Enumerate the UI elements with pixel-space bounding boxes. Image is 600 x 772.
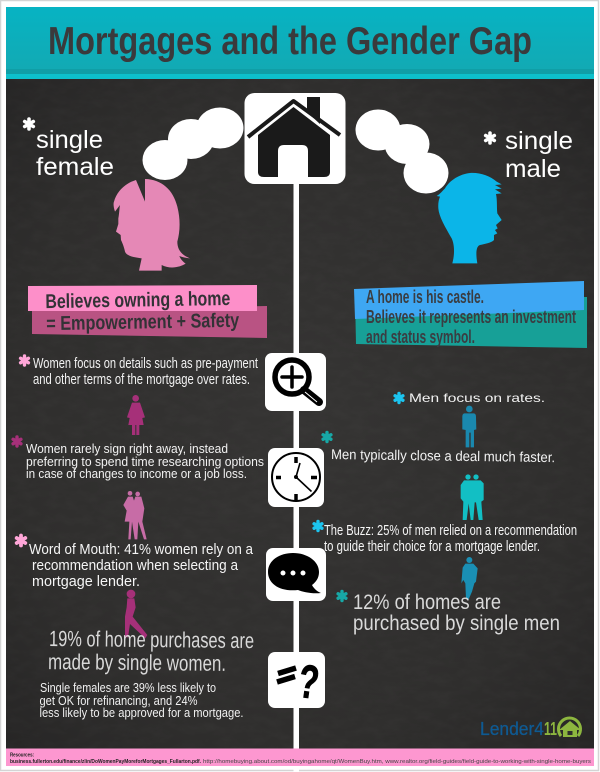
- text: men close faster: Men typically close a deal much faster.: [331, 446, 555, 465]
- icon: walking woman: [125, 590, 147, 638]
- label: single female: single: [36, 126, 103, 154]
- text: women focus on details: and other terms of the mortgage over rates.: [33, 372, 250, 388]
- text: women rarely sign: preferring to spend time researching options: [26, 454, 264, 469]
- text: 19% of home purchases: made by single women.: [48, 649, 226, 676]
- label: single male: male: [505, 155, 561, 183]
- footer: resources: business.fullerton.edu/finance/zlin/DoWomenPayMoreforMortgages_Fullarton.pdf.: [10, 759, 202, 765]
- text: women focus on details: Women focus on details such as pre-payment: [33, 356, 258, 372]
- text: word of mouth: recommendation when selecting a: [32, 557, 239, 574]
- text: single females less likely: [40, 680, 244, 720]
- label: single female: female: [36, 153, 114, 181]
- logo: Lender411: [480, 718, 581, 739]
- text: single females less likely: get OK for refinancing, and 24%: [40, 693, 198, 708]
- callout text: male: A home is his castle.: [366, 287, 484, 307]
- text: women rarely sign: in case of changes to income or a job loss.: [26, 466, 247, 481]
- text: 12% of homes: purchased by single men: [353, 612, 560, 635]
- text: 19% of home purchases: [48, 626, 254, 676]
- callout: female belief: [28, 285, 267, 338]
- footer: resources: http://homebuying.about.com/od/buyingahome/qt/WomenBuy.htm, www.realtor.org/field-guides/field-guide-to-working-with-single-home-buyers: [203, 759, 592, 765]
- icon box: magnifying glass: [265, 353, 326, 411]
- callout text: female: [45, 288, 240, 335]
- footer: resources: [6, 748, 594, 766]
- text: word of mouth: mortgage lender.: [32, 573, 140, 590]
- icon box: speech bubble: [266, 548, 326, 601]
- text: 12% of homes: 12% of homes are: [353, 591, 501, 614]
- text: word of mouth: Word of Mouth: 41% women rely on a: [29, 541, 254, 558]
- icon box: equals question mark: ?: [295, 654, 322, 709]
- icon: two men figures: [461, 474, 484, 520]
- text: women rarely sign: [13, 437, 264, 481]
- label: single male: [486, 127, 573, 183]
- label: single male: single: [505, 127, 573, 155]
- logo: Lender411: Lender4: [480, 719, 544, 739]
- icon: house sign: [244, 93, 346, 184]
- text: the buzz: to guide their choice for a mortgage lender.: [324, 539, 540, 555]
- icon: woman figure: [127, 395, 145, 435]
- icon: walking man: [461, 557, 478, 600]
- icon: two women figures: [123, 491, 147, 539]
- icon: female head silhouette: [114, 179, 190, 271]
- logo: Lender411: 11: [544, 719, 557, 739]
- text: men focus on rates: Men focus on rates.: [409, 391, 545, 405]
- footer: resources: Resources:: [10, 752, 34, 758]
- callout text: female: Believes owning a home: [45, 288, 231, 313]
- text: women focus on details: [21, 356, 258, 388]
- text: single females less likely: Single females are 39% less likely to: [40, 680, 216, 695]
- callout text: female: = Empowerment + Safety: [46, 310, 240, 335]
- text: word of mouth: [17, 536, 254, 590]
- callout text: male: [366, 287, 576, 347]
- text: men close faster: [323, 432, 555, 465]
- icon box: clock: [268, 448, 324, 507]
- callout: male belief: [354, 281, 587, 348]
- label: single female: [25, 119, 114, 181]
- icon box: equals question mark: [268, 652, 325, 709]
- icon: man figure: [462, 406, 476, 447]
- icon: female thought bubbles: [142, 108, 244, 180]
- icon: male head silhouette: [437, 173, 502, 263]
- icon: male thought bubbles: [356, 110, 448, 194]
- text: single females less likely: less likely to be approved for a mortgage.: [40, 705, 244, 720]
- text: the buzz: [314, 522, 577, 555]
- header band: [6, 7, 594, 79]
- text: 12% of homes: [338, 591, 560, 635]
- central pole: [294, 180, 299, 772]
- text: women rarely sign: Women rarely sign right away, instead: [26, 441, 228, 456]
- callout text: male: and status symbol.: [366, 327, 475, 347]
- text: 19% of home purchases: 19% of home purchases are: [49, 626, 254, 653]
